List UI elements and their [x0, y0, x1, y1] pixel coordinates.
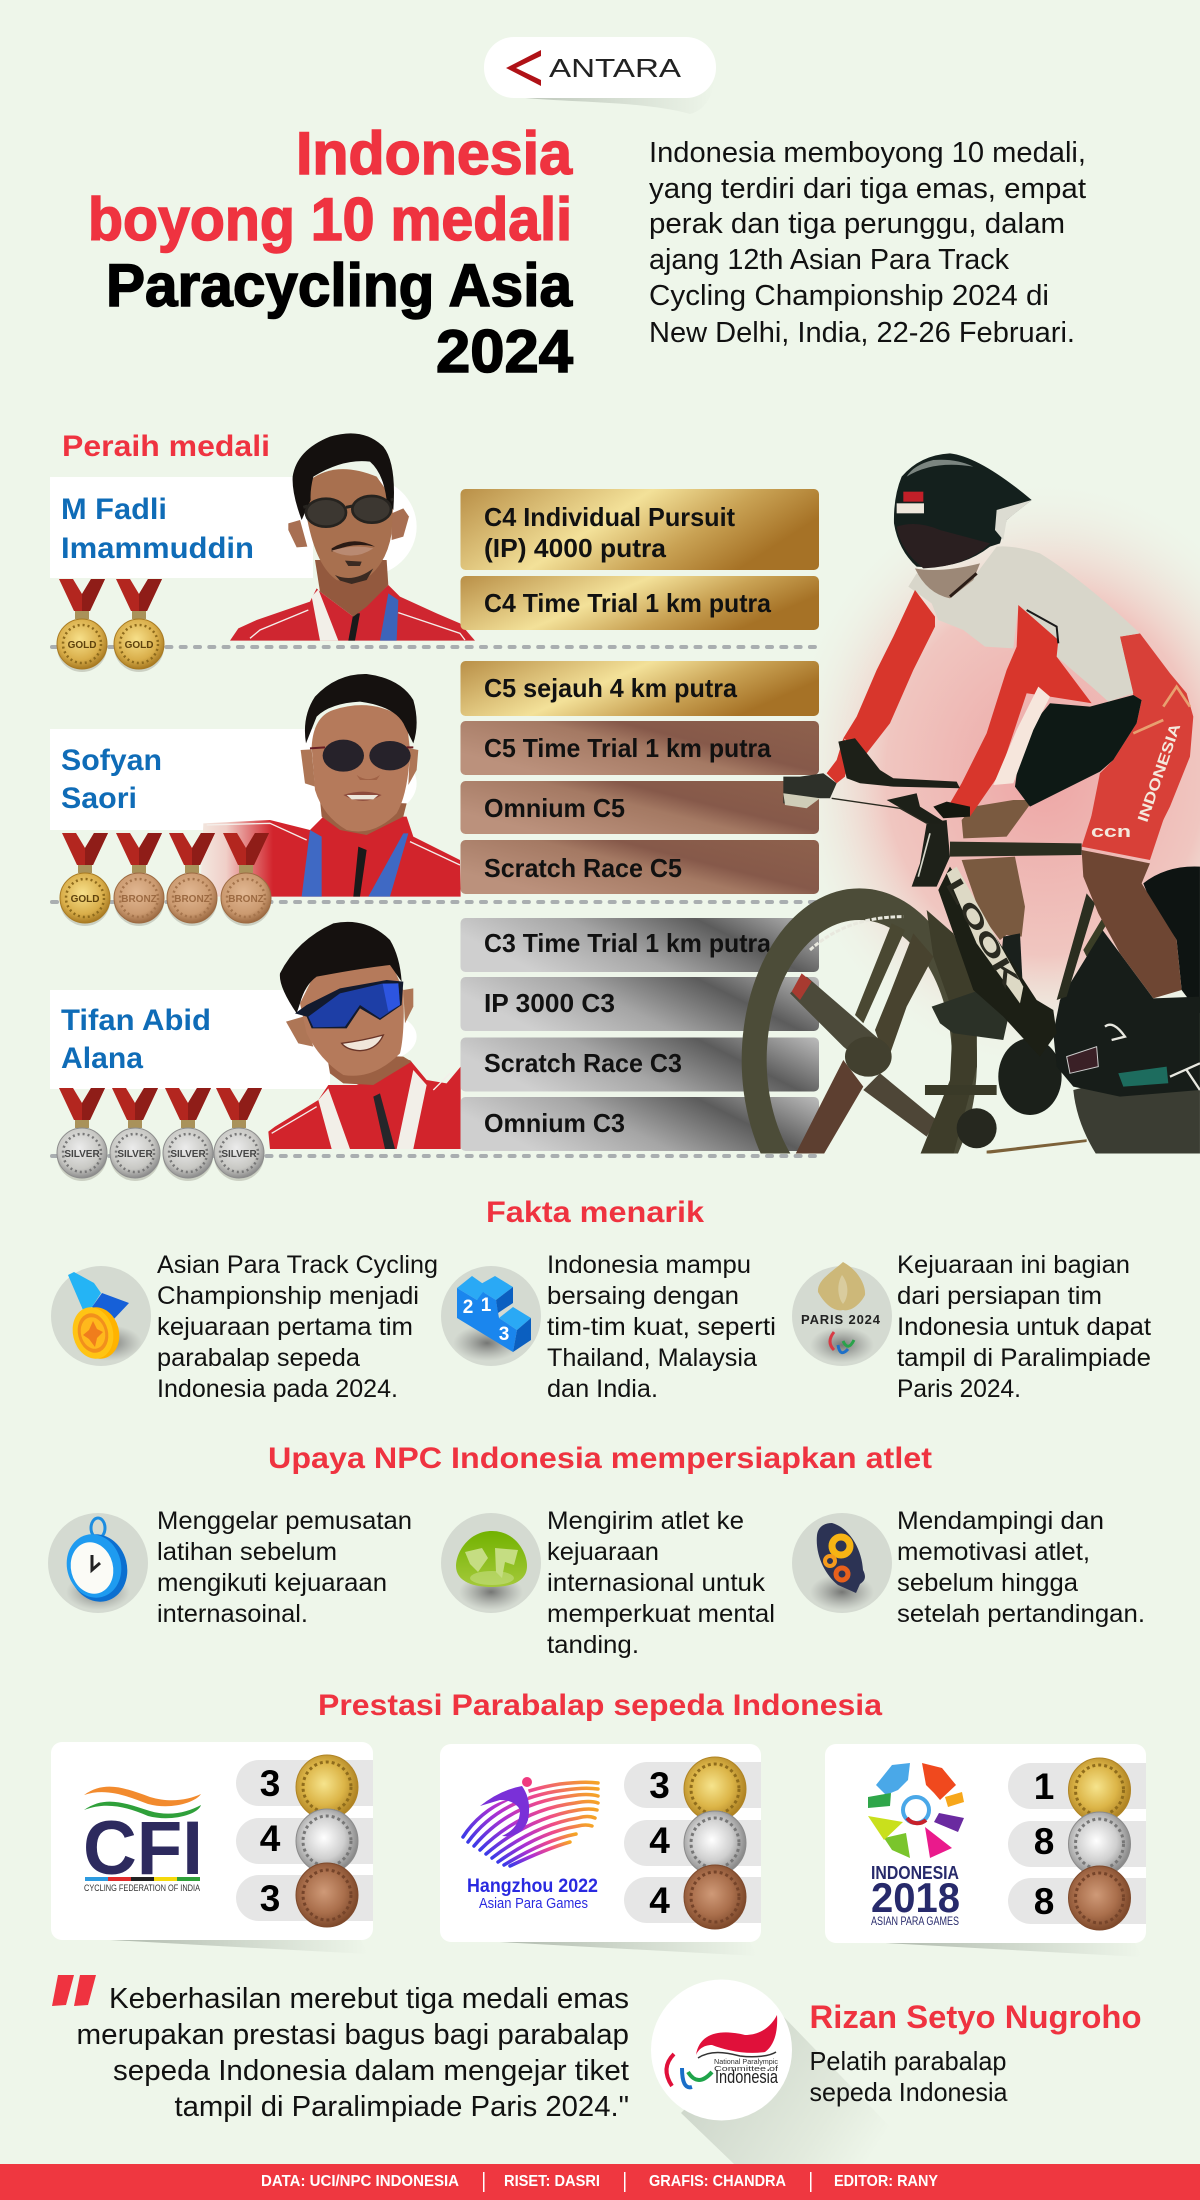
speaker badge: NPC Indonesia logo: National Paralympic — [714, 2059, 779, 2066]
panel: CFI card — [51, 1742, 373, 1954]
medals: M Fadli — [57, 579, 164, 672]
bar: Omnium C3 — [460, 1097, 819, 1151]
quote mark — [52, 1975, 96, 2006]
text block: Thailand, Malaysia — [547, 1344, 757, 1372]
icon: medal — [51, 1266, 151, 1366]
footer: RISET: DASRI — [504, 2173, 600, 2190]
icon: head with gears — [792, 1513, 892, 1613]
text block — [897, 1507, 1145, 1628]
bar: Omnium C5: Omnium C5 — [484, 793, 625, 823]
intro text: Cycling Championship 2024 di — [649, 280, 1049, 312]
intro text: Indonesia memboyong 10 medali, — [649, 137, 1086, 169]
text block: internasional untuk — [547, 1569, 766, 1597]
panel: fakta 2 — [441, 1251, 776, 1403]
footer: GRAFIS: CHANDRA — [649, 2173, 786, 2190]
bar: Scratch Race C5 — [460, 840, 819, 894]
text block: Mendampingi dan — [897, 1507, 1104, 1535]
speaker badge: NPC Indonesia logo — [651, 1980, 926, 2164]
bar: C5 Time Trial — [460, 721, 819, 775]
text block — [897, 1251, 1151, 1403]
logo: Indonesia 2018: INDONESIA — [871, 1863, 959, 1883]
text block: tim-tim kuat, seperti — [547, 1313, 776, 1341]
text block: mengikuti kejuaraan — [157, 1569, 387, 1597]
athlete names: Sofyan — [61, 744, 162, 777]
speaker role — [810, 2046, 1008, 2107]
panel: Indonesia 2018 card — [825, 1744, 1146, 1957]
bar: IP 3000 C3: IP 3000 C3 — [484, 988, 615, 1018]
footer — [0, 2164, 1200, 2200]
text block: bersaing dengan — [547, 1282, 739, 1310]
title: 2024 — [436, 318, 574, 385]
medals: Sofyan Saori — [60, 833, 271, 926]
quote text: Keberhasilan merebut tiga medali emas — [109, 1983, 629, 2015]
athlete names: Imammuddin — [61, 532, 254, 565]
athlete names: M Fadli — [61, 493, 167, 526]
bicycle and lower body — [742, 800, 1200, 1154]
intro text: yang terdiri dari tiga emas, empat — [649, 173, 1086, 205]
athlete names: Alana — [61, 1042, 143, 1075]
bar: C4 Individual Pursuit: C4 Individual Pursuit — [484, 502, 735, 532]
quote text: sepeda Indonesia dalam mengejar tiket — [113, 2055, 629, 2087]
text block — [157, 1507, 412, 1628]
footer: EDITOR: RANY — [834, 2173, 938, 2190]
medals: Sofyan Saori: BRONZ — [228, 894, 264, 905]
text block: kejuaraan — [547, 1538, 659, 1566]
text block: Menggelar pemusatan — [157, 1507, 412, 1535]
athlete names: Saori — [61, 782, 137, 815]
athlete names — [61, 493, 254, 1075]
shorts and frame lettering: LOOK — [940, 874, 1025, 994]
medals: Sofyan Saori: BRONZ — [174, 894, 210, 905]
text block: Championship menjadi — [157, 1282, 419, 1310]
shorts and frame lettering — [940, 721, 1184, 994]
icon: Paris 2024 logo — [792, 1262, 892, 1366]
medal counts: 3 — [260, 1878, 280, 1919]
text block: tanding. — [547, 1631, 639, 1659]
quote text: tampil di Paralimpiade Paris 2024." — [174, 2091, 629, 2123]
medal counts: 4 — [649, 1820, 670, 1861]
medals: Tifan Abid Alana: SILVER — [221, 1149, 257, 1160]
panel: Hangzhou card — [440, 1744, 761, 1956]
bar: C4 Individual Pursuit — [460, 489, 819, 570]
panel: upaya 3 — [792, 1507, 1145, 1628]
text block: Mengirim atlet ke — [547, 1507, 744, 1535]
text block: kejuaraan pertama tim — [157, 1313, 413, 1341]
text block: internasoinal. — [157, 1600, 308, 1628]
speaker badge: NPC Indonesia logo: Indonesia — [715, 2067, 779, 2087]
footer: DATA: UCI/NPC INDONESIA — [261, 2173, 459, 2190]
medals: Tifan Abid Alana: SILVER — [170, 1149, 206, 1160]
text block: setelah pertandingan. — [897, 1600, 1145, 1628]
medal counts: 3 — [649, 1765, 670, 1806]
logo: Hangzhou 2022 — [463, 1777, 598, 1912]
panel: fakta 3 — [792, 1251, 1151, 1403]
speaker name: Rizan Setyo Nugroho — [810, 1999, 1142, 2035]
medal counts: 8 — [1034, 1821, 1054, 1862]
bar: C3 Time Trial — [460, 918, 819, 972]
logo: ANTARA: ANTARA — [549, 53, 682, 83]
background glow behind cyclist — [780, 475, 1200, 1075]
rider upper body — [783, 453, 1193, 840]
logo: CFI: CFI — [83, 1806, 203, 1891]
text block: parabalap sepeda — [157, 1344, 360, 1372]
medals: M Fadli: GOLD — [125, 640, 153, 651]
text block: sebelum hingga — [897, 1569, 1078, 1597]
bar: Omnium C3: Omnium C3 — [484, 1108, 625, 1138]
text block: dari persiapan tim — [897, 1282, 1102, 1310]
portrait: Sofyan Saori — [200, 674, 461, 897]
medal counts: 4 — [649, 1880, 670, 1921]
logo: CFI: CYCLING FEDERATION OF INDIA — [84, 1883, 200, 1893]
intro text — [649, 137, 1086, 349]
text block — [547, 1507, 775, 1659]
medals: Sofyan Saori: BRONZ — [121, 894, 157, 905]
text block: memotivasi atlet, — [897, 1538, 1090, 1566]
medal bars — [460, 489, 819, 1151]
cyclist illustration — [742, 453, 1200, 1232]
portrait: Tifan Abid Alana — [268, 922, 461, 1149]
logo: Indonesia 2018: ASIAN PARA GAMES — [871, 1914, 959, 1928]
quote text: merupakan prestasi bagus bagi parabalap — [76, 2019, 629, 2051]
logo: Hangzhou 2022: Hangzhou 2022 — [467, 1876, 598, 1897]
medals: Tifan Abid Alana: SILVER — [117, 1149, 153, 1160]
bar: C4 Time Trial — [460, 576, 819, 630]
icon: stopwatch — [48, 1513, 148, 1613]
medal counts — [236, 1755, 373, 1927]
bar: Scratch Race C3 — [460, 1038, 819, 1092]
title: Paracycling Asia — [106, 252, 573, 319]
heading: Fakta menarik: Fakta menarik — [486, 1196, 704, 1229]
bar: C4 Time Trial: C4 Time Trial 1 km putra — [484, 588, 772, 618]
athlete names: Tifan Abid — [61, 1004, 211, 1037]
text block: Indonesia untuk dapat — [897, 1313, 1151, 1341]
text block: Asian Para Track Cycling — [157, 1251, 438, 1279]
logo: ANTARA — [484, 37, 716, 114]
text block: latihan sebelum — [157, 1538, 337, 1566]
shorts and frame lettering: ccn — [1091, 822, 1131, 841]
speaker badge: NPC Indonesia logo: Committee of — [714, 2066, 778, 2073]
logo: Hangzhou 2022: Asian Para Games — [479, 1895, 588, 1912]
logo: Indonesia 2018: 2018 — [871, 1874, 960, 1921]
medals: Tifan Abid Alana: SILVER — [64, 1149, 100, 1160]
heading: Upaya NPC: Upaya NPC Indonesia mempersiapkan atlet — [268, 1442, 932, 1475]
intro text: New Delhi, India, 22-26 Februari. — [649, 317, 1075, 349]
text block: Indonesia pada 2024. — [157, 1375, 398, 1403]
medal counts — [624, 1757, 761, 1929]
title — [88, 120, 574, 385]
portrait: M Fadli — [230, 433, 475, 641]
heading: Prestasi: Prestasi Parabalap sepeda Indonesia — [318, 1689, 882, 1722]
bar: C3 Time Trial: C3 Time Trial 1 km putra — [484, 928, 772, 958]
speaker role: sepeda Indonesia — [810, 2077, 1008, 2107]
bar: C5 sejauh 4 km: C5 sejauh 4 km putra — [484, 673, 738, 703]
heading: Peraih medali: Peraih medali — [62, 430, 270, 463]
medals: M Fadli: GOLD — [68, 640, 96, 651]
panel: fakta 1 — [51, 1251, 438, 1403]
title: Indonesia — [296, 120, 573, 187]
bar: C5 Time Trial: C5 Time Trial 1 km putra — [484, 733, 772, 763]
bar: C5 sejauh 4 km — [460, 661, 819, 716]
text block: dan India. — [547, 1375, 658, 1403]
athlete name panels — [50, 477, 330, 1089]
icon: podium — [441, 1266, 541, 1366]
medal counts — [1008, 1758, 1146, 1930]
medals: Tifan Abid Alana — [57, 1088, 264, 1181]
text block — [547, 1251, 776, 1403]
text block: Paris 2024. — [897, 1375, 1021, 1403]
intro text: ajang 12th Asian Para Track — [649, 244, 1009, 276]
text block — [157, 1251, 438, 1403]
medals: Sofyan Saori: GOLD — [71, 894, 99, 905]
text block: tampil di Paralimpiade — [897, 1344, 1151, 1372]
icon: globe — [441, 1513, 541, 1613]
panel: upaya 2 — [441, 1507, 775, 1659]
medal counts: 8 — [1034, 1881, 1054, 1922]
icon: Paris 2024 logo: PARIS 2024 — [801, 1312, 881, 1327]
icon: podium: 1 — [481, 1295, 492, 1316]
icon: podium: 2 — [463, 1297, 473, 1318]
title: boyong 10 medali — [88, 186, 572, 253]
medal counts: 4 — [260, 1818, 281, 1859]
panel: upaya 1 — [48, 1507, 412, 1628]
shorts and frame lettering: INDONESIA — [1135, 721, 1184, 824]
bar: Scratch Race C5: Scratch Race C5 — [484, 853, 682, 883]
medal counts: 1 — [1034, 1766, 1054, 1807]
text block: Indonesia mampu — [547, 1251, 751, 1279]
text block: Kejuaraan ini bagian — [897, 1251, 1130, 1279]
icon: podium: 3 — [499, 1324, 509, 1345]
logo: Indonesia 2018 — [868, 1763, 964, 1928]
bar: C4 Individual Pursuit: (IP) 4000 putra — [484, 533, 667, 563]
quote text — [76, 1983, 629, 2123]
bar: Omnium C5 — [460, 781, 819, 834]
intro text: perak dan tiga perunggu, dalam — [649, 208, 1065, 240]
speaker role: Pelatih parabalap — [810, 2046, 1006, 2076]
medal counts: 3 — [260, 1763, 280, 1804]
text block: memperkuat mental — [547, 1600, 775, 1628]
bar: IP 3000 C3 — [460, 977, 819, 1031]
bar: Scratch Race C3: Scratch Race C3 — [484, 1048, 682, 1078]
